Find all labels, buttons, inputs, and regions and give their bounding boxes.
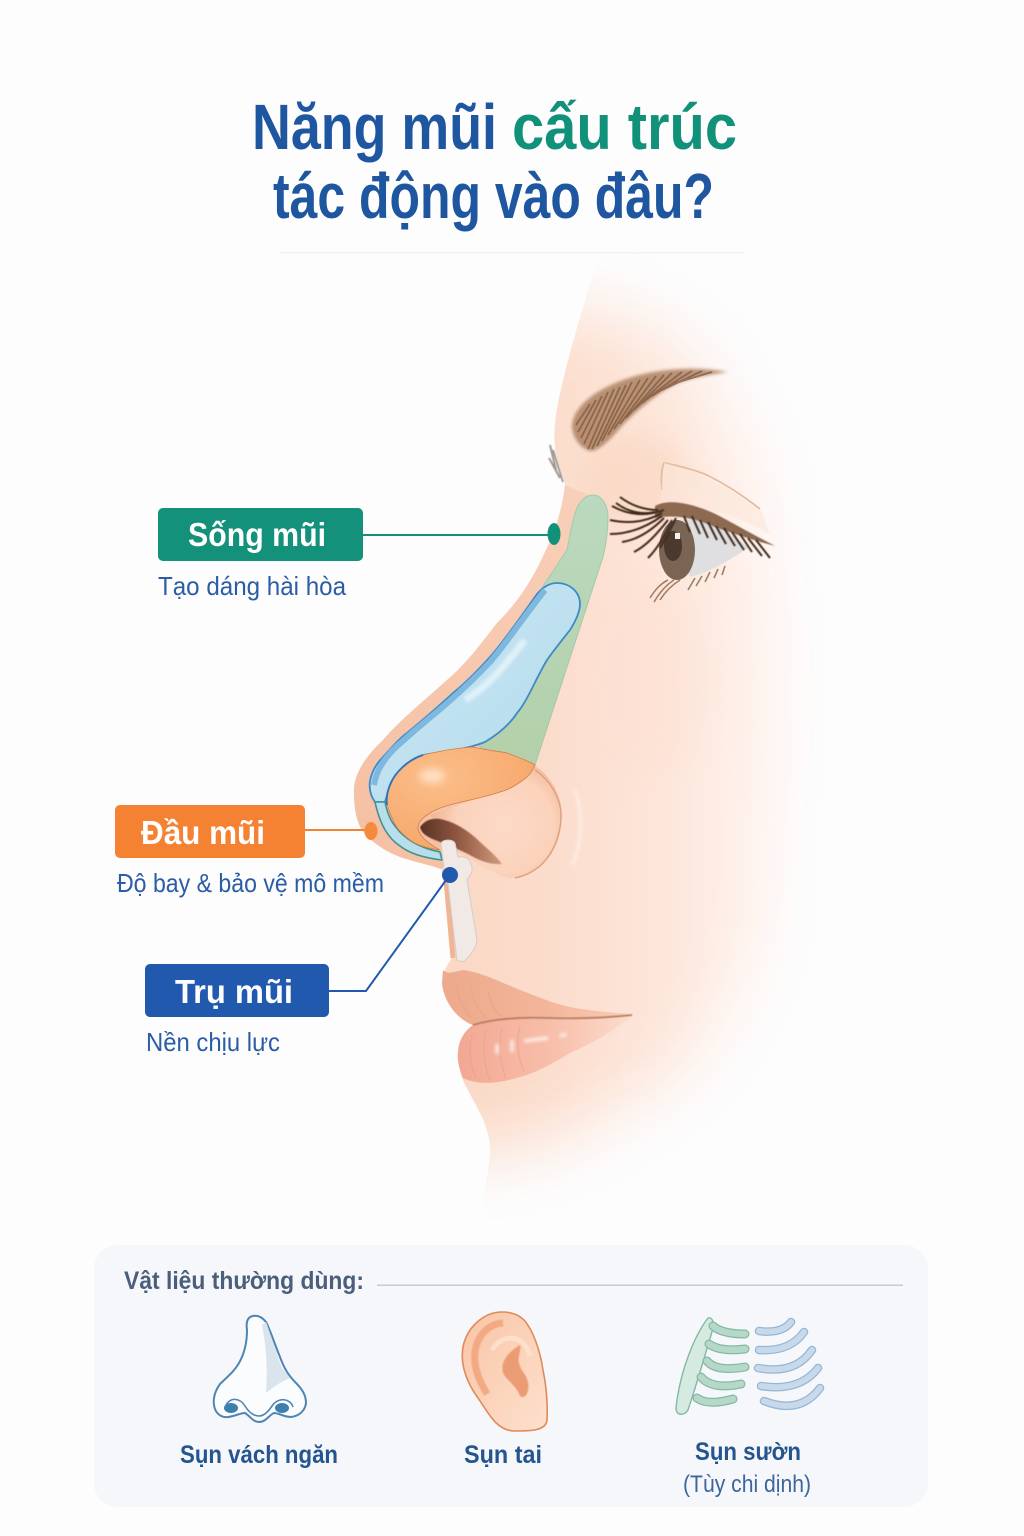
- connector: [329, 876, 449, 991]
- green ribs: [697, 1322, 820, 1406]
- label: Sụn tai: [464, 1441, 542, 1469]
- callout: Sống mũi: [158, 508, 560, 601]
- sublabel: (Tùy chi dịnh): [683, 1471, 811, 1498]
- badge: [145, 964, 329, 1017]
- panel: materials: [94, 1245, 928, 1507]
- lips: [442, 970, 632, 1083]
- upper lip: [442, 970, 628, 1025]
- connector: [363, 534, 548, 536]
- implant: orange tip graft: [387, 747, 535, 850]
- iris: [659, 520, 695, 580]
- title: tác động vào đâu?: [273, 160, 714, 232]
- icon: ribs: [676, 1318, 820, 1414]
- description: Tạo dáng hài hòa: [158, 571, 346, 601]
- dot: [442, 867, 458, 883]
- lower lip: [458, 1016, 632, 1083]
- lower lashes: [650, 566, 725, 602]
- upper lid band: [655, 502, 775, 546]
- label: Sụn vách ngăn: [180, 1441, 338, 1469]
- ala skin: [430, 766, 562, 878]
- implant: blue bridge silicone: [370, 583, 580, 802]
- eye: [610, 463, 775, 602]
- soft crease: [572, 790, 581, 865]
- sclera: [668, 518, 748, 577]
- illustration: face profile: [354, 283, 782, 1186]
- eyelid crease: [661, 463, 760, 509]
- dot: [548, 523, 560, 545]
- connector: [305, 829, 366, 831]
- eye socket shading: [590, 439, 688, 520]
- implant: lower tip strip: [375, 802, 442, 860]
- description: Độ bay & bảo vệ mô mềm: [117, 868, 384, 898]
- description: Nền chịu lực: [146, 1027, 280, 1057]
- nose skin: [354, 485, 600, 869]
- badge: [158, 508, 363, 561]
- blue ribs: [758, 1322, 820, 1406]
- columella skin edge: [446, 880, 453, 958]
- sternum: [676, 1318, 714, 1414]
- label: Sụn sườn: [695, 1438, 801, 1466]
- badge label: Trụ mũi: [175, 973, 293, 1010]
- face skin: [354, 283, 782, 1186]
- title: [252, 91, 737, 232]
- implant: white columella strut: [441, 840, 477, 962]
- blue highlight: [465, 640, 525, 700]
- nostril: [420, 819, 502, 864]
- badge label: Sống mũi: [188, 516, 326, 553]
- lip line: [473, 1015, 632, 1025]
- callout: Trụ mũi: [145, 867, 458, 1057]
- badge label: Đầu mũi: [141, 814, 265, 851]
- icon: ear: [462, 1312, 547, 1431]
- upper lid skin: [660, 463, 770, 535]
- title: Năng mũi: [252, 91, 497, 163]
- implant: green bridge: [470, 495, 608, 765]
- upper lashes: [610, 497, 770, 558]
- lip highlights: [497, 1034, 566, 1054]
- far eye lashes: [549, 445, 563, 482]
- panel heading: Vật liệu thường dùng:: [124, 1267, 364, 1295]
- title: cấu trúc: [512, 91, 737, 163]
- dot: [364, 822, 378, 840]
- icon: septal cartilage nose: [214, 1316, 306, 1422]
- callout: Đầu mũi: [115, 805, 384, 898]
- cheek shading: [570, 580, 710, 780]
- lip ridges: [456, 985, 524, 1080]
- eyebrow: [572, 369, 728, 451]
- blue darker upper edge: [374, 590, 545, 785]
- badge: [115, 805, 305, 858]
